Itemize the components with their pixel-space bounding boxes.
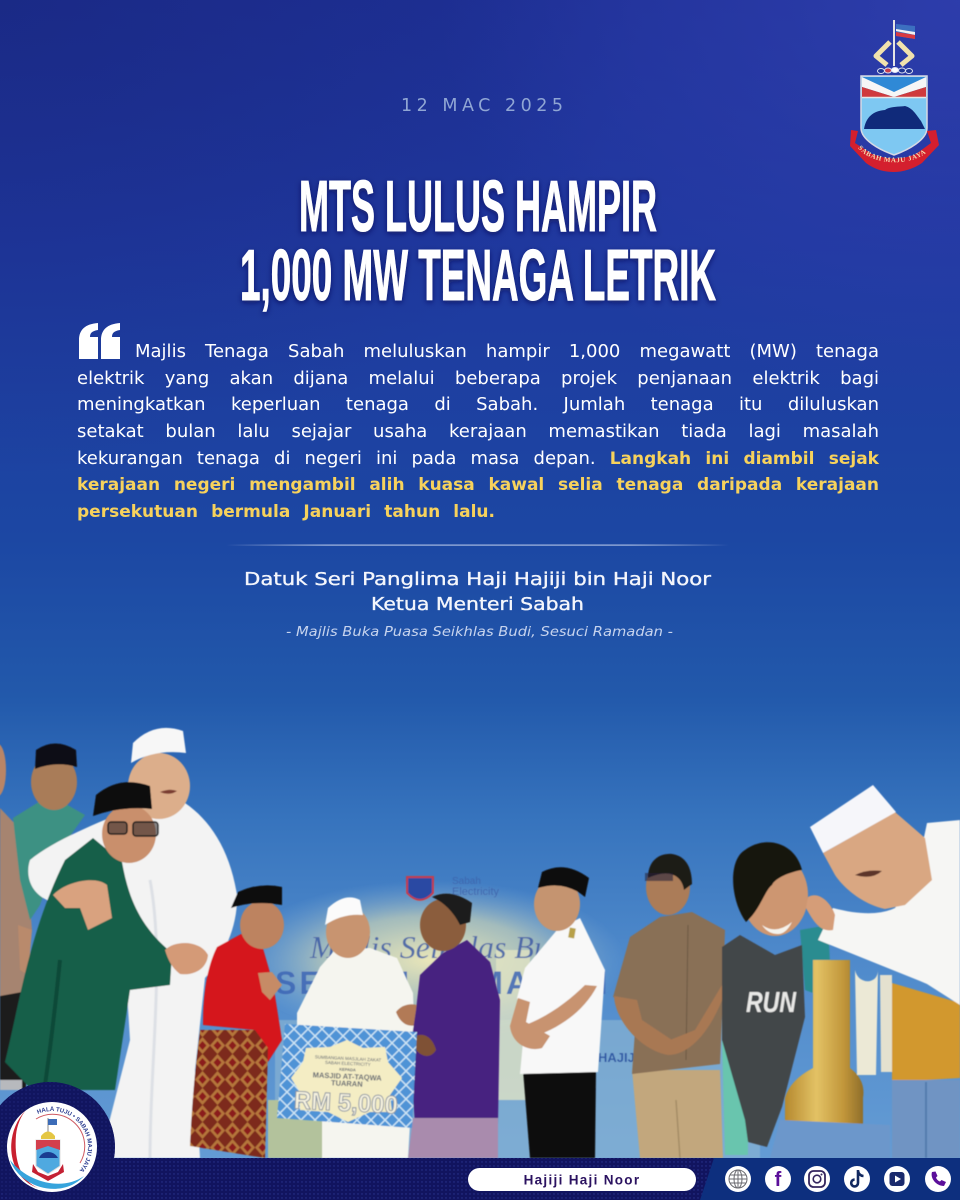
cheque text: MASJID AT-TAQWA	[312, 1070, 382, 1083]
quote body text: meningkatkan keperluan tenaga di Sabah. Jumlah tenaga itu diluluskan	[77, 394, 879, 415]
backdrop logo: Sabah	[452, 876, 481, 887]
backdrop small text: HAJIJI	[598, 1050, 638, 1065]
cheque board	[277, 1024, 417, 1128]
T-shirt print: RUN	[746, 987, 797, 1019]
quote body text	[77, 341, 880, 522]
person: tall man in white robe	[28, 728, 237, 1158]
person: man in purple	[408, 894, 500, 1158]
quote body text: persekutuan bermula Januari tahun lalu.	[77, 502, 495, 522]
icon: phone	[925, 1166, 951, 1192]
crest flag	[893, 20, 915, 66]
quote body text: kerajaan negeri mengambil alih kuasa kawal selia tenaga daripada kerajaan	[77, 475, 879, 495]
photo group of people	[0, 728, 960, 1158]
date: 12 MAC 2025	[401, 96, 563, 116]
person: man in white robe with cap	[297, 897, 428, 1158]
backdrop logo	[407, 876, 500, 900]
crest beads	[878, 68, 912, 74]
name pill	[468, 1168, 696, 1191]
crest arms	[876, 42, 912, 65]
cheque text: TUARAN	[331, 1078, 363, 1089]
event backdrop behind the group	[235, 876, 760, 1158]
cheque text: SABAH ELECTRICITY	[325, 1060, 371, 1067]
icon: facebook	[765, 1166, 791, 1192]
crest motto scroll	[850, 130, 939, 172]
icon: website globe	[725, 1166, 751, 1192]
backdrop heading: SESUCI RAMADAN	[275, 965, 610, 1001]
cheque text	[293, 1053, 400, 1119]
crest motto scroll: SABAH MAJU JAYA	[858, 146, 926, 162]
person: boy in green	[5, 782, 208, 1090]
icon: tiktok	[844, 1166, 870, 1192]
title	[240, 167, 716, 316]
badge: Hala Tuju logo: HALA TUJU • SABAH MAJU JAYA	[36, 1106, 92, 1172]
person: man in red with sarong	[190, 885, 284, 1158]
quote body text: setakat bulan lalu sejajar usaha kerajaan memastikan tiada lagi masalah	[77, 421, 879, 442]
person: bending man with white cap	[806, 785, 960, 1158]
cheque text: KEPADA	[339, 1067, 356, 1072]
speaker name: Datuk Seri Panglima Haji Hajiji bin Haji Noor	[244, 569, 712, 590]
name pill: Hajiji Haji Noor	[524, 1172, 640, 1188]
quote body text: Majlis Tenaga Sabah meluluskan hampir 1,000 megawatt (MW) tenaga	[135, 341, 879, 362]
decor: gold pillar and balusters	[770, 925, 892, 1158]
cheque text: SUMBANGAN MASJLAH ZAKAT	[315, 1054, 382, 1063]
cheque text: RM 5,000	[293, 1086, 398, 1119]
quote body text: elektrik yang akan dijana melalui beberapa projek penjanaan elektrik bagi	[77, 368, 879, 389]
backdrop logo: Electricity	[452, 886, 500, 898]
crest: Sabah coat of arms	[850, 20, 939, 172]
badge crest	[32, 1118, 64, 1181]
icon: quotation mark	[79, 323, 120, 359]
speaker role: Ketua Menteri Sabah	[371, 594, 584, 615]
badge ring text	[38, 1111, 88, 1174]
icon: youtube	[884, 1166, 910, 1192]
icon: facebook: f	[775, 1169, 782, 1191]
badge: Hala Tuju logo	[0, 1082, 115, 1198]
quote body text: kekurangan tenaga di negeri ini pada masa depan. Langkah ini diambil sejak	[77, 448, 879, 469]
event caption: - Majlis Buka Puasa Seikhlas Budi, Sesuci Ramadan -	[286, 625, 673, 640]
backdrop script title: Majlis Seikhlas Budi	[309, 929, 575, 965]
crest shield	[861, 76, 927, 155]
person: man in teal behind	[13, 744, 85, 920]
bottom bar	[0, 1158, 960, 1200]
icon: instagram	[804, 1166, 830, 1192]
person: boy in grey t-shirt	[722, 842, 808, 1155]
person: far left man	[0, 744, 32, 1090]
person: man in white shirt	[510, 867, 605, 1158]
person: man in brown shirt	[613, 854, 725, 1158]
